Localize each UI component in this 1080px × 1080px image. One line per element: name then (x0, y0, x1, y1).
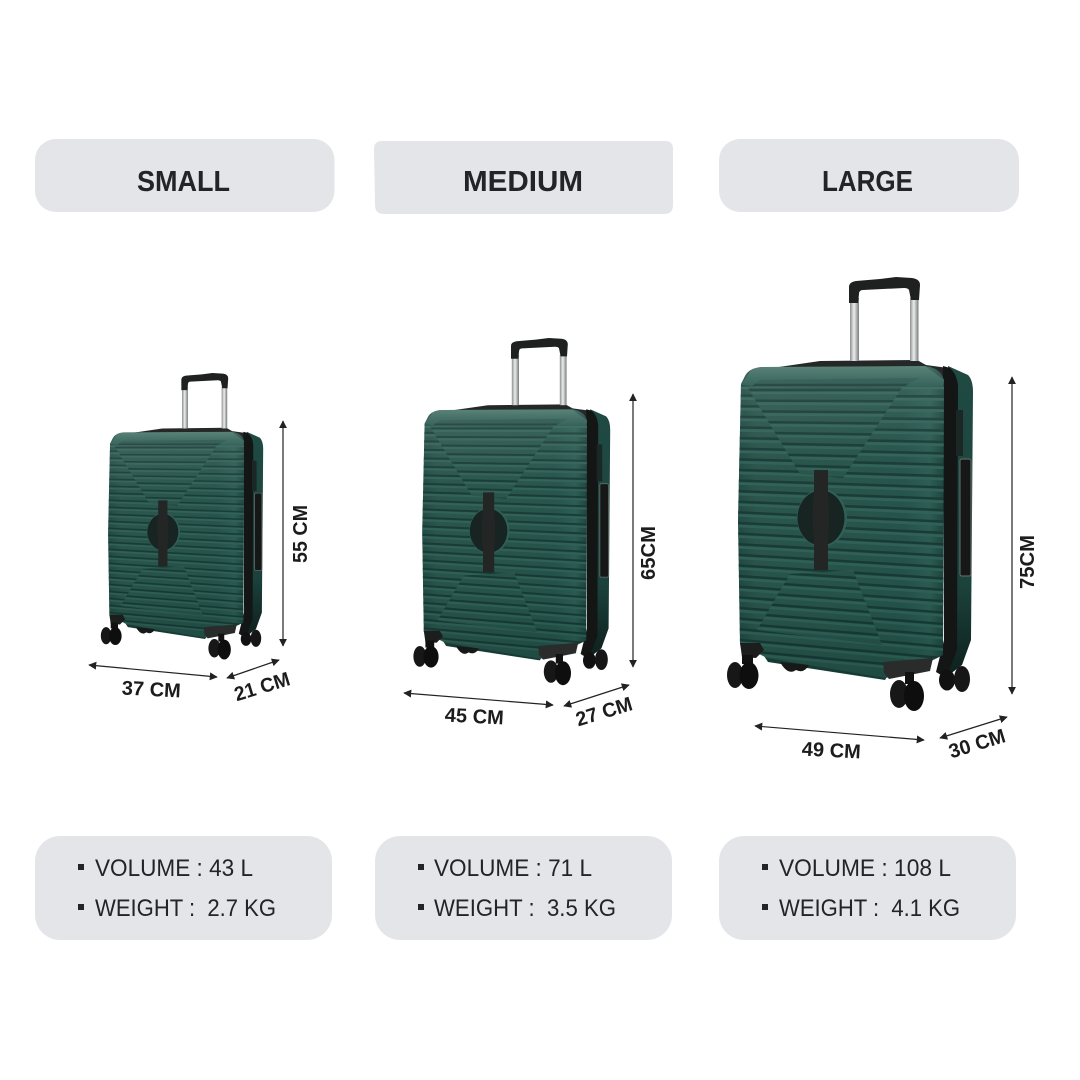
specs panel: medium: VOLUME : 71 L (434, 855, 592, 882)
dimensions: small suitcase (89, 421, 312, 706)
heading: small: SMALL (137, 166, 230, 198)
dimensions: small suitcase: 21 CM (232, 668, 293, 706)
suitcase: large (727, 277, 973, 711)
suitcase: small (101, 373, 263, 659)
suitcase: medium (413, 338, 610, 685)
dimensions: medium suitcase: 27 CM (573, 693, 635, 731)
dimensions: large suitcase: 49 CM (801, 738, 861, 764)
specs panel: large (719, 836, 1016, 940)
heading: large: LARGE (822, 166, 913, 198)
dimensions: medium suitcase: 65CM (638, 526, 660, 580)
dimensions: large suitcase: 30 CM (946, 725, 1008, 763)
dimensions: large suitcase (755, 377, 1039, 764)
specs panel: small (35, 836, 332, 940)
specs panel: large: VOLUME : 108 L (779, 855, 951, 882)
heading: small (35, 139, 334, 212)
dimensions: medium suitcase: 45 CM (444, 704, 504, 730)
heading: medium: MEDIUM (463, 166, 583, 198)
specs panel: small: WEIGHT : 2.7 KG (95, 895, 276, 922)
dimensions: medium suitcase (404, 394, 660, 731)
specs panel: medium (375, 836, 672, 940)
dimensions: large suitcase: 75CM (1017, 535, 1039, 589)
specs panel: large: WEIGHT : 4.1 KG (779, 895, 960, 922)
specs panel: small: VOLUME : 43 L (95, 855, 253, 882)
specs panel: medium: WEIGHT : 3.5 KG (434, 895, 616, 922)
heading: large (719, 139, 1019, 212)
dimensions: small suitcase: 37 CM (121, 677, 181, 703)
dimensions: small suitcase: 55 CM (290, 505, 312, 563)
heading: medium (374, 141, 673, 214)
